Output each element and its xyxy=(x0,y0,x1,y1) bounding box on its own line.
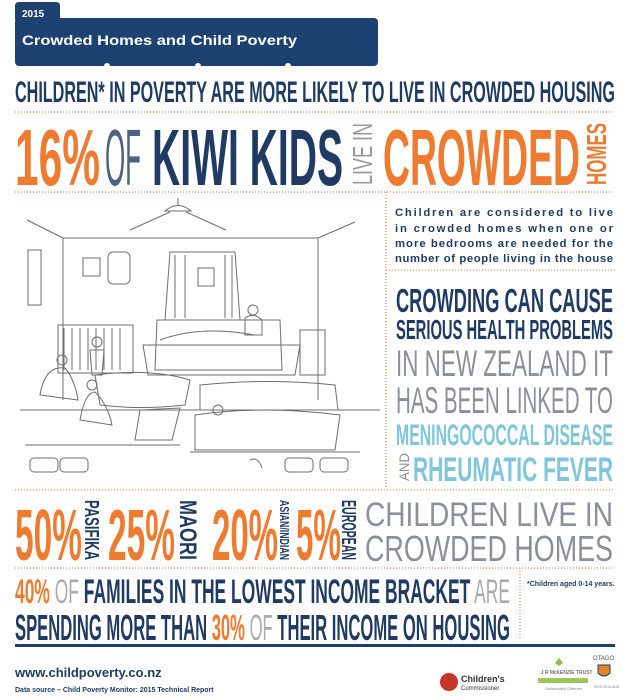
footer url: www.childpoverty.co.nz xyxy=(14,665,162,680)
illustration: crowded room sketch xyxy=(20,198,380,472)
logo: childrens commissioner xyxy=(440,673,505,692)
headline: 16% of kiwi kids live in crowded homes: OF xyxy=(105,113,141,202)
headline: 16% of kiwi kids live in crowded homes: LIVE IN xyxy=(347,123,378,185)
definition paragraph xyxy=(395,207,614,265)
ethnicity stats row xyxy=(15,496,613,576)
headline: 16% of kiwi kids live in crowded homes: 16% xyxy=(15,113,100,202)
health text block xyxy=(396,282,613,489)
logo: University of Otago: NEW ZEALAND xyxy=(594,685,620,689)
definition paragraph: in crowded homes when one or xyxy=(395,223,614,235)
ethnicity stats row: 5% xyxy=(296,496,341,576)
ethnicity stats row: 25% xyxy=(108,496,175,576)
ethnicity stats row: 50% xyxy=(15,496,82,576)
headline: 16% of kiwi kids live in crowded homes: HOMES xyxy=(581,123,612,185)
logo: University of Otago xyxy=(593,656,620,689)
definition paragraph: more bedrooms are needed for the xyxy=(395,238,613,250)
logo: JR McKenzie Trust xyxy=(538,658,593,691)
definition paragraph: Children are considered to live xyxy=(395,207,613,219)
logo: JR McKenzie Trust: J R McKENZIE TRUST xyxy=(541,670,593,676)
footnote: *Children aged 0-14 years. xyxy=(527,581,615,588)
header tab: Crowded Homes and Child Poverty xyxy=(22,32,297,48)
headline: 16% of kiwi kids live in crowded homes: KIWI KIDS xyxy=(152,113,343,202)
headline: 16% of kiwi kids live in crowded homes xyxy=(15,113,612,202)
logo: childrens commissioner: Children's xyxy=(461,674,505,684)
housing cost statement xyxy=(15,573,510,648)
ethnicity stats row: EUROPEAN xyxy=(337,500,359,560)
health text block: AND xyxy=(396,453,412,481)
ethnicity stats row: MAORI xyxy=(174,500,201,560)
logo: childrens commissioner: Commissioner xyxy=(461,686,499,692)
header tab xyxy=(15,2,378,69)
data source: Data source – Child Poverty Monitor: 2015 Technical Report xyxy=(15,687,214,694)
logo: University of Otago: OTAGO xyxy=(593,656,615,662)
logo: JR McKenzie Trust: Deliberately Different xyxy=(545,686,583,691)
definition paragraph: number of people living in the house xyxy=(395,253,613,265)
header tab: 2015 xyxy=(22,9,45,20)
ethnicity stats row: 20% xyxy=(212,496,278,576)
ethnicity stats row: ASIAN/INDIAN xyxy=(277,500,292,560)
ethnicity stats row: PASIFIKA xyxy=(80,500,102,560)
